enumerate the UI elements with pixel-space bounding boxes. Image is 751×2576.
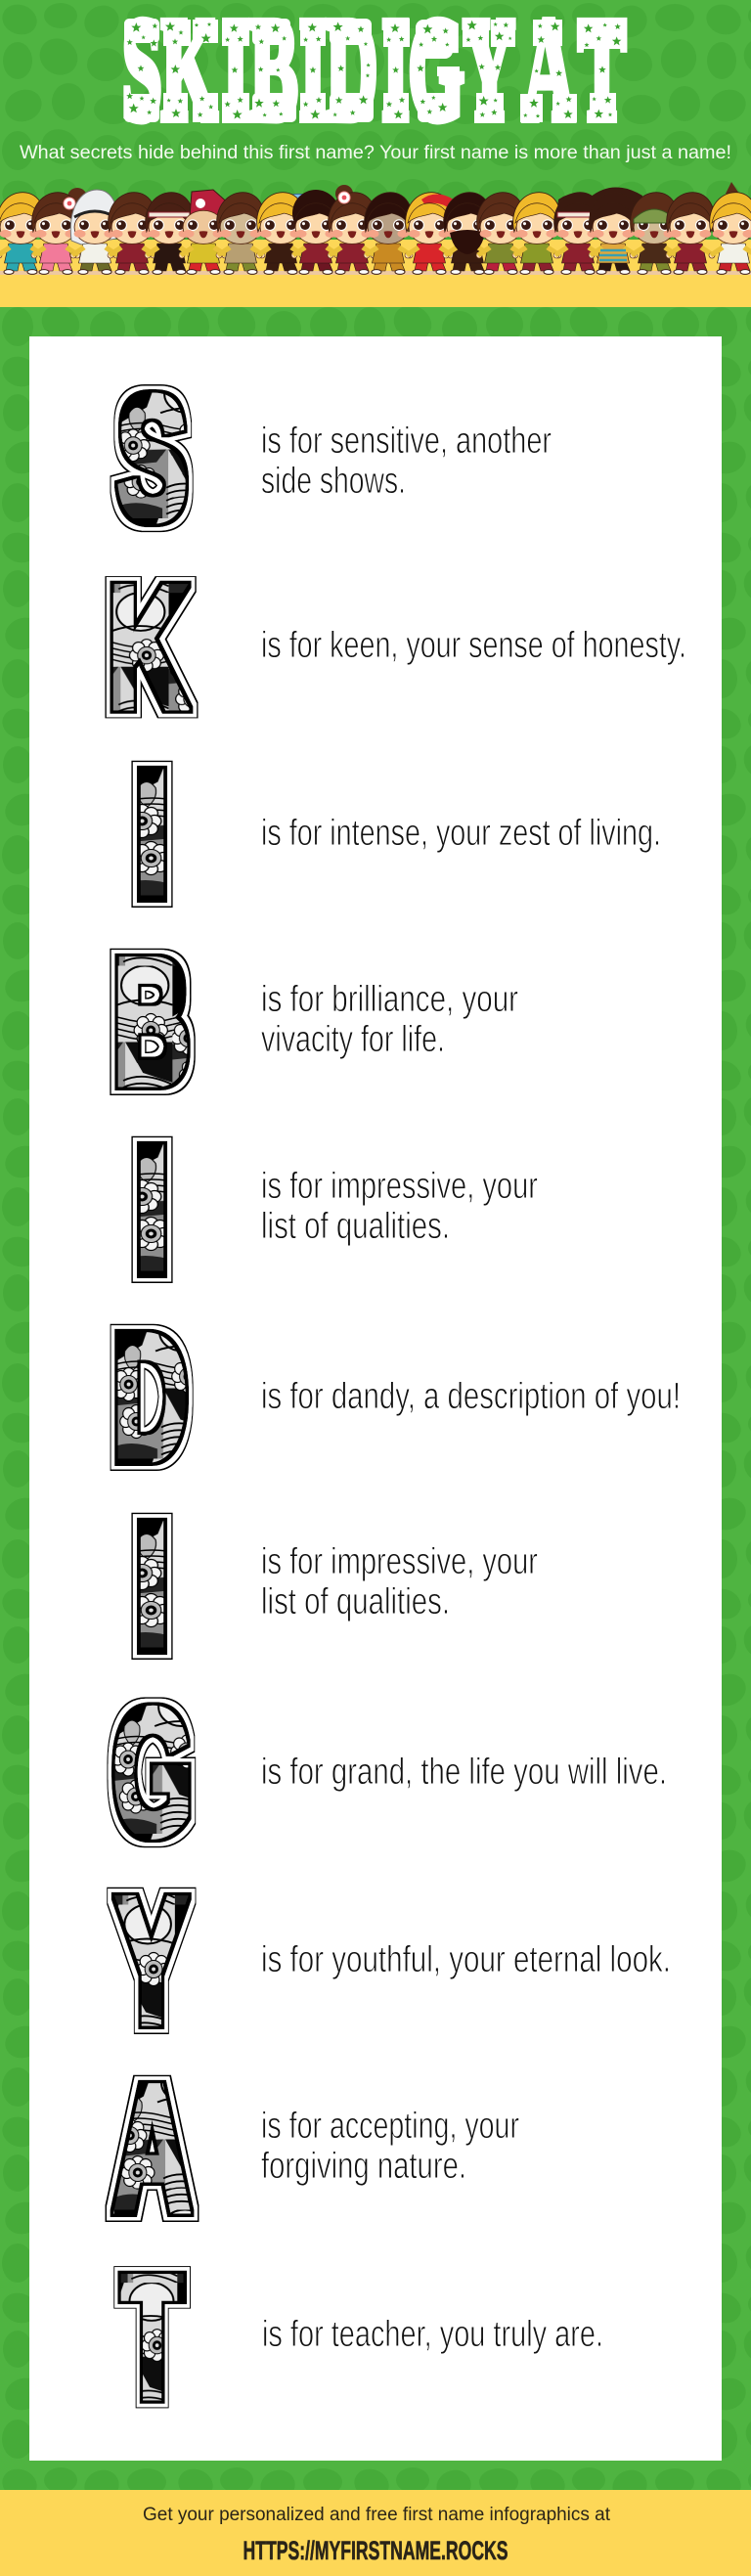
letter S: S [117, 362, 187, 556]
character 6 [179, 190, 231, 274]
row I [135, 1486, 538, 1685]
letter A: A [114, 2049, 191, 2247]
character 16 [553, 193, 603, 274]
character 2 [31, 188, 87, 274]
subtitle: What secrets hide behind this first name? Your first name is more than just a name! [20, 143, 731, 163]
text B [261, 979, 518, 1060]
text I: list of qualities. [261, 1581, 450, 1622]
character 1 [0, 193, 45, 274]
text A: forgiving nature. [261, 2146, 466, 2187]
character 8 [256, 193, 316, 274]
row G [113, 1674, 667, 1872]
text S [261, 421, 552, 502]
text I [261, 1166, 538, 1247]
character 5 [145, 193, 194, 274]
character 9 [291, 190, 340, 274]
character 4 [108, 193, 156, 274]
characters row [0, 182, 751, 274]
footer url: HTTPS://MYFIRSTNAME.ROCKS [243, 2536, 508, 2565]
letter T: T [122, 2242, 182, 2434]
letter K: K [109, 552, 186, 744]
row B [113, 922, 518, 1121]
text S: is for sensitive, another [261, 421, 552, 462]
letter B: B [113, 922, 190, 1121]
letter Y: Y [116, 1861, 186, 2061]
row Y [116, 1861, 671, 2061]
text I [261, 1541, 538, 1622]
character 11 [364, 193, 413, 274]
row I [135, 1109, 538, 1309]
text I: list of qualities. [261, 1206, 450, 1247]
letter I: I [135, 733, 169, 933]
text B: is for brilliance, your [261, 979, 518, 1020]
character 13 [443, 193, 492, 274]
panel: white letters card [29, 336, 722, 2461]
row S [117, 362, 552, 556]
row D [113, 1300, 681, 1497]
text T: is for teacher, you truly are. [262, 2314, 603, 2355]
letter G: G [113, 1674, 192, 1872]
text S: side shows. [261, 461, 406, 502]
character 20 [709, 182, 751, 274]
letter I: I [135, 1109, 169, 1309]
character 3 [70, 190, 119, 274]
text I: is for impressive, your [261, 1541, 538, 1582]
letter D: D [113, 1300, 188, 1497]
letter I: I [135, 1486, 169, 1685]
row A [114, 2049, 519, 2247]
text B: vivacity for life. [261, 1019, 445, 1060]
character 17 [589, 187, 642, 274]
character 10 [328, 185, 376, 274]
character 7 [216, 193, 265, 274]
footer line: Get your personalized and free first name infographics at [143, 2505, 611, 2525]
text A: is for accepting, your [261, 2106, 519, 2147]
character 15 [512, 193, 561, 274]
row K [109, 552, 686, 744]
character 18 [630, 193, 679, 274]
character 12 [405, 193, 457, 274]
yellow band behind characters [0, 240, 751, 307]
row T [122, 2242, 603, 2434]
character 19 [666, 193, 715, 274]
footer band [0, 2490, 751, 2576]
text I: is for impressive, your [261, 1166, 538, 1207]
text A [261, 2106, 519, 2187]
row I [135, 733, 661, 933]
character 14 [476, 193, 525, 274]
